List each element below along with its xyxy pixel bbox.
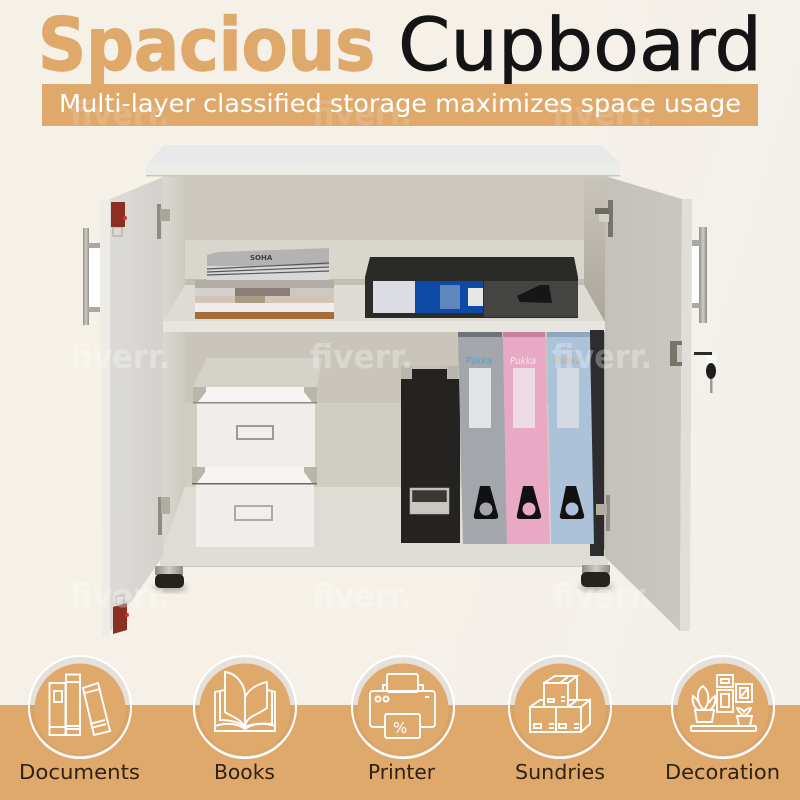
top left red latch xyxy=(111,202,127,236)
label: Documents: Documents xyxy=(19,760,140,784)
fiverr watermarks xyxy=(70,94,652,615)
fiverr watermarks: fiverr. xyxy=(552,94,652,133)
icon: shelf with plants and frames xyxy=(691,675,756,731)
magazines stack xyxy=(195,248,334,319)
icon: open book xyxy=(215,672,275,731)
cupboard xyxy=(83,145,717,636)
right foot xyxy=(579,565,613,591)
title: Spacious xyxy=(38,3,375,88)
fiverr watermarks: fiverr. xyxy=(312,576,412,615)
title xyxy=(38,3,762,88)
icon badge: sundries xyxy=(509,656,611,758)
bottom tan band xyxy=(0,705,800,800)
icon: books and documents xyxy=(50,674,110,735)
icon badge: books xyxy=(194,656,296,758)
label: Decoration: Decoration xyxy=(665,760,780,784)
icon: printer: % xyxy=(393,719,407,737)
right hinges xyxy=(595,200,613,531)
left door handle xyxy=(83,228,100,325)
label: Books: Books xyxy=(214,760,275,784)
grey binder: Pukka xyxy=(466,356,492,367)
fiverr watermarks: fiverr. xyxy=(70,94,170,133)
door latch plate xyxy=(670,341,682,366)
magazines stack: SOHA xyxy=(250,254,273,262)
subtitle banner: Multi-layer classified storage maximizes space usage xyxy=(59,89,741,118)
black binder on shelf xyxy=(365,257,578,318)
right door handle xyxy=(692,227,707,323)
fiverr watermarks: fiverr. xyxy=(310,337,413,376)
grey binder xyxy=(458,332,507,544)
cupboard top panel xyxy=(146,145,620,176)
cupboard interior xyxy=(160,175,607,567)
lock key xyxy=(694,352,717,393)
label: Sundries: Sundries xyxy=(515,760,605,784)
pink binder xyxy=(503,332,550,544)
upper white storage box xyxy=(193,358,322,467)
blue binder xyxy=(547,332,594,544)
bottom left red latch xyxy=(113,596,129,634)
icon: stacked boxes xyxy=(530,676,590,732)
label: Printer: Printer xyxy=(368,760,436,784)
fiverr watermarks: fiverr. xyxy=(552,337,652,376)
dark gap behind binders xyxy=(590,330,604,556)
icon badge: printer xyxy=(352,656,454,758)
fiverr watermarks: fiverr. xyxy=(70,337,170,376)
black magazine box xyxy=(401,366,460,543)
left hinges xyxy=(157,204,170,535)
left door xyxy=(100,177,163,636)
fiverr watermarks: fiverr. xyxy=(312,94,412,133)
title: Cupboard xyxy=(398,3,762,88)
pink binder: Pukka xyxy=(510,356,536,367)
lower white storage box xyxy=(192,467,317,547)
fiverr watermarks: fiverr. xyxy=(70,576,170,615)
upper shelf edge xyxy=(163,321,605,332)
left foot xyxy=(153,566,187,592)
icon badge: documents xyxy=(29,656,131,758)
lower shelf edge xyxy=(160,556,608,566)
subtitle banner xyxy=(42,84,758,126)
blue binder: Pukka xyxy=(555,356,581,367)
fiverr watermarks: fiverr. xyxy=(552,576,652,615)
right door xyxy=(605,176,692,631)
icon badge: decoration xyxy=(672,656,774,758)
